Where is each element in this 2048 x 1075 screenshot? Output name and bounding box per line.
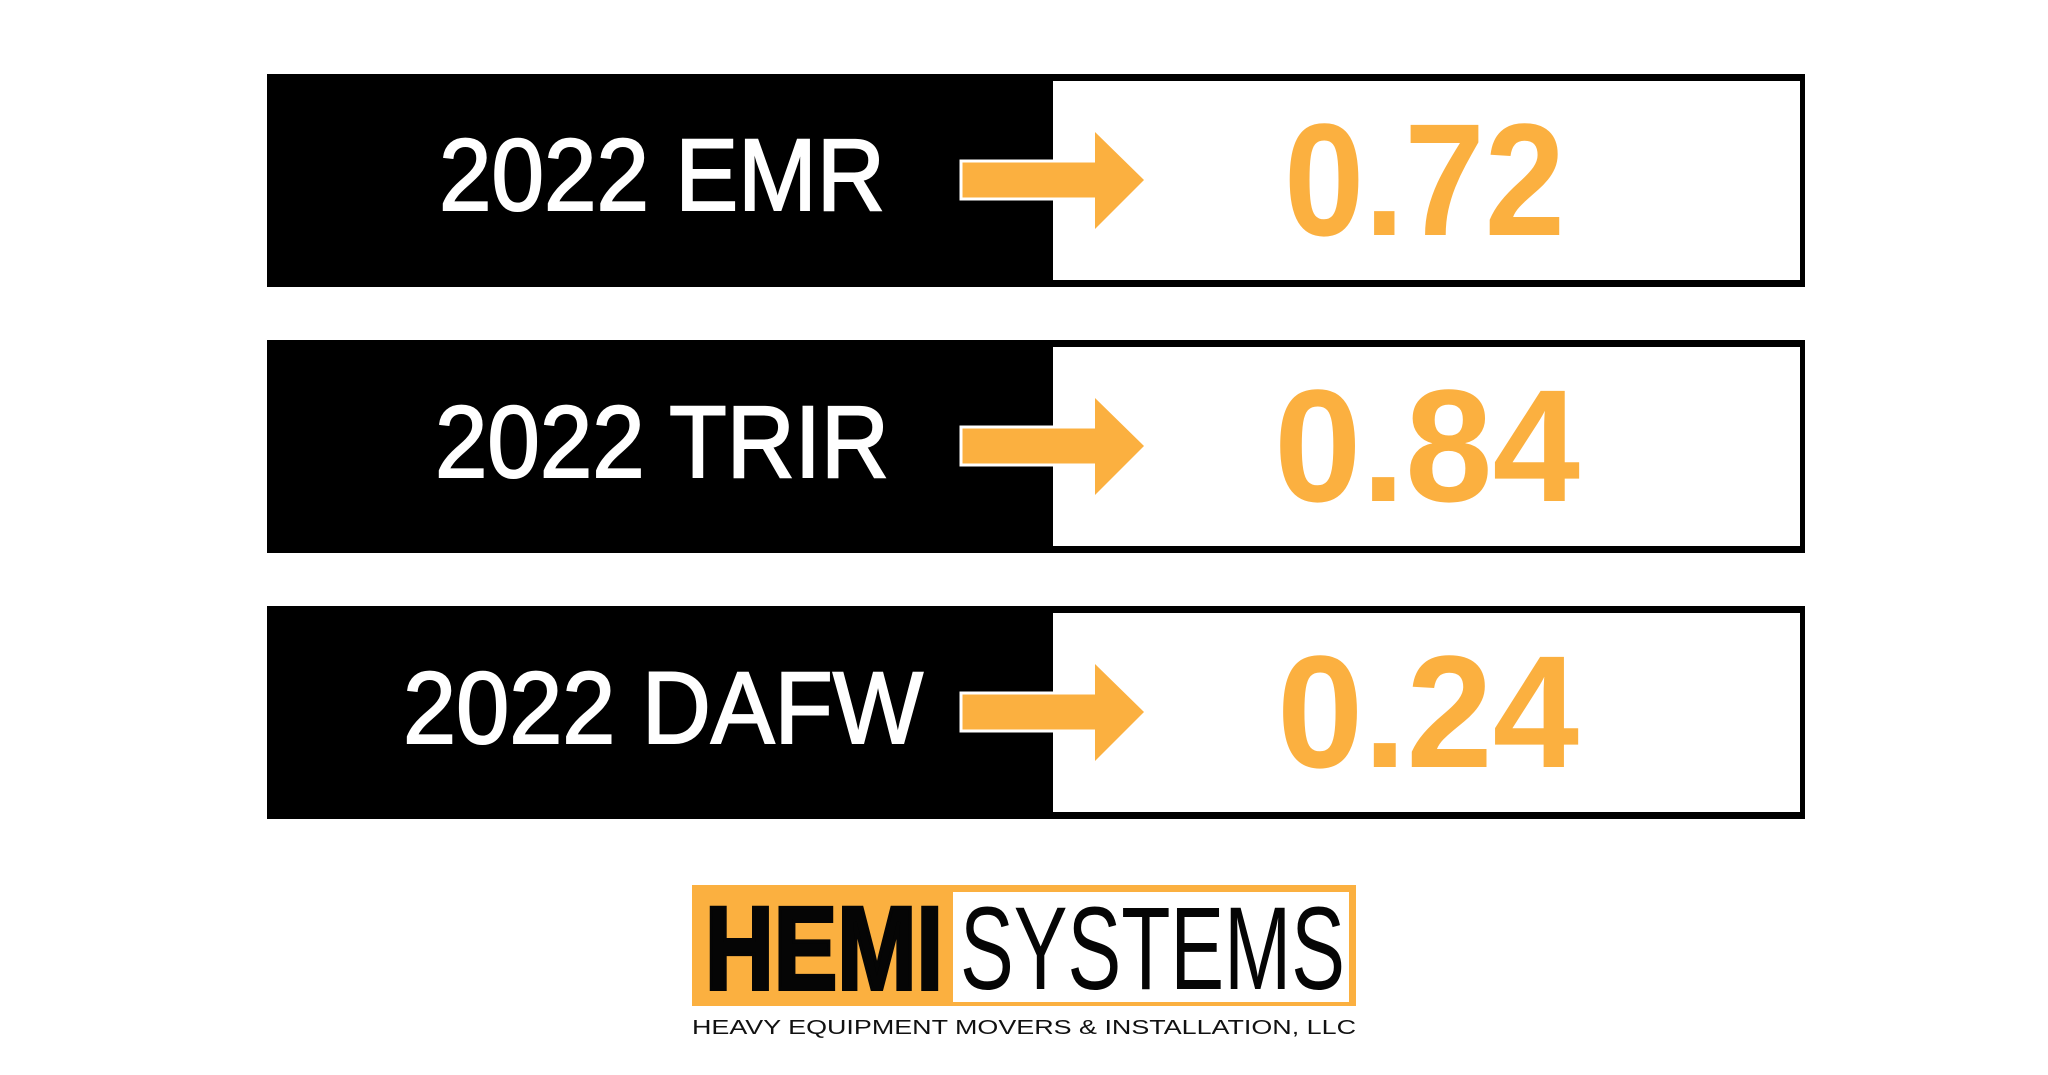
value: 0.24: 0.24 — [1277, 622, 1579, 801]
label: 2022 DAFW: 2022 DAFW — [403, 651, 923, 765]
logo: HEMI SYSTEMS — [692, 883, 1356, 1039]
label: 2022 TRIR: 2022 TRIR — [435, 385, 889, 499]
label: 2022 EMR: 2022 EMR — [439, 118, 885, 232]
tagline: HEAVY EQUIPMENT MOVERS & INSTALLATION, LLC — [692, 1017, 1356, 1039]
panel: EMR — [267, 74, 1805, 287]
arrow — [961, 132, 1144, 229]
arrow — [961, 398, 1144, 495]
panel: DAFW — [267, 606, 1805, 819]
value: 0.72: 0.72 — [1284, 90, 1565, 269]
logo text SYSTEMS: SYSTEMS — [960, 883, 1345, 1015]
arrow — [961, 664, 1144, 761]
value: 0.84: 0.84 — [1274, 356, 1580, 535]
panel: TRIR — [267, 340, 1805, 553]
logo text HEMI: HEMI — [705, 883, 943, 1015]
